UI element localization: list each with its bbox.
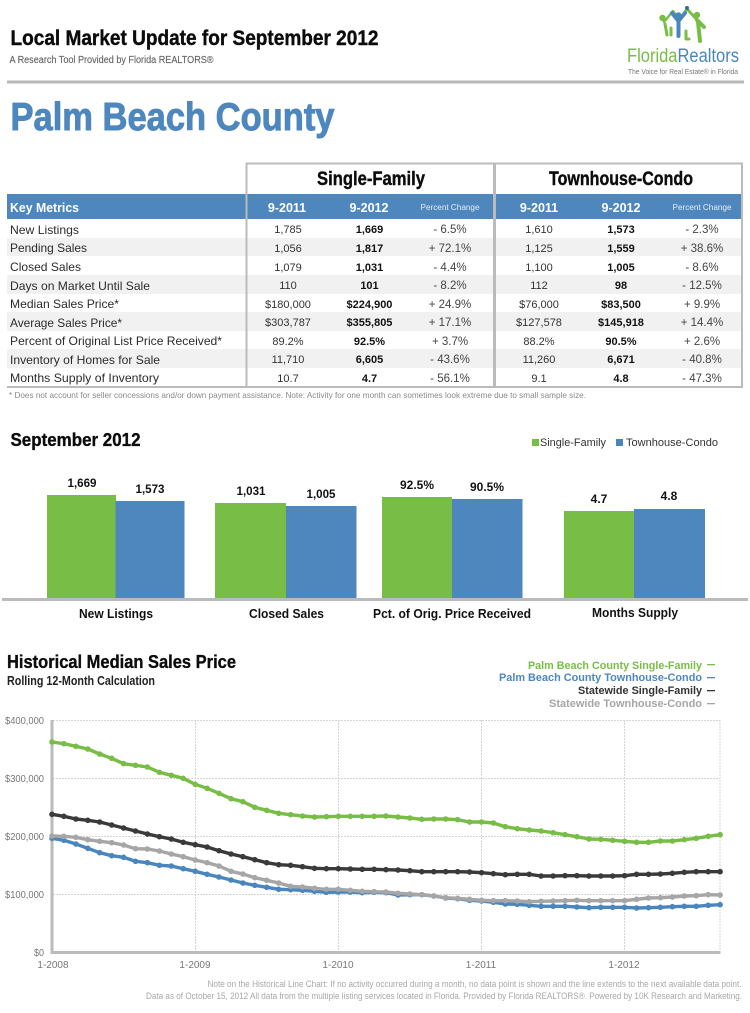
townhouse-condo values (516, 224, 723, 385)
townhouse-condo values: + 2.6% (684, 336, 720, 348)
table header bar: 9-2012 (350, 201, 389, 215)
single-family values: 11,710 (272, 354, 304, 366)
line: Palm Beach County Townhouse-Condo (52, 838, 720, 908)
single-family values: + 17.1% (429, 317, 471, 329)
line chart legend (499, 660, 715, 710)
bars: Months Supply: 4.8 (661, 489, 678, 503)
bars: Pct. of Orig. Price Received: 92.5% (400, 478, 434, 492)
townhouse-condo values: $76,000 (519, 299, 559, 311)
townhouse-condo values: 1,610 (525, 224, 553, 236)
single-family values: - 43.6% (430, 354, 470, 366)
line: Statewide Single-Family (52, 814, 720, 876)
county heading: Palm Beach County (10, 96, 335, 139)
townhouse-condo values: 1,125 (525, 243, 553, 255)
row labels: Pending Sales (10, 241, 87, 255)
y axis labels: $200,000 (5, 832, 44, 843)
row labels: New Listings (10, 223, 79, 237)
townhouse-condo values: - 12.5% (682, 280, 722, 292)
bars: New Listings (47, 476, 184, 621)
townhouse-condo values: $127,578 (516, 317, 562, 329)
y axis labels: $100,000 (5, 890, 44, 901)
bars: Closed Sales: 1,031 (236, 484, 266, 498)
single-family values: 101 (360, 280, 379, 292)
line chart legend: Palm Beach County Townhouse-Condo (499, 672, 702, 684)
bars: Pct. of Orig. Price Received (373, 478, 531, 621)
townhouse-condo values: 112 (530, 280, 548, 292)
townhouse-condo values: 9.1 (531, 373, 547, 385)
single-family values: 1,669 (356, 224, 383, 236)
townhouse-condo values: 1,005 (607, 262, 635, 274)
line chart heading: Historical Median Sales Price (7, 652, 236, 672)
single-family values: 1,056 (274, 243, 302, 255)
single-family values (265, 224, 471, 385)
townhouse-condo values: - 8.6% (685, 262, 719, 274)
line chart legend: Statewide Single-Family (578, 685, 703, 697)
bar chart legend: Single-Family (540, 437, 606, 449)
header (7, 6, 744, 139)
table header bar: Key Metrics (10, 201, 79, 215)
townhouse-condo values: 1,573 (607, 224, 635, 236)
townhouse-condo values: 1,100 (525, 262, 553, 274)
line chart subheading: Rolling 12-Month Calculation (7, 674, 155, 688)
townhouse-condo values: $145,918 (598, 317, 644, 329)
y axis labels: $400,000 (5, 716, 44, 727)
townhouse-condo values: 88.2% (523, 336, 555, 348)
bars: New Listings: New Listings (79, 606, 153, 621)
single-family values: $180,000 (265, 299, 311, 311)
single-family values: $224,900 (347, 299, 392, 311)
bar chart legend: Townhouse-Condo (626, 437, 718, 449)
chart footnotes (146, 979, 742, 1001)
logo: Florida Realtors (627, 6, 739, 76)
townhouse-condo values: + 38.6% (681, 243, 723, 255)
x axis labels: 1-2008 (37, 960, 69, 971)
row labels: Average Sales Price* (10, 316, 122, 330)
line: Palm Beach County Single-Family (52, 742, 720, 842)
table header bar: 9-2011 (268, 201, 306, 215)
single-family values: + 72.1% (429, 243, 471, 255)
line chart legend: Palm Beach County Single-Family (528, 660, 703, 672)
x axis labels: 1-2011 (466, 960, 497, 971)
panel: September 2012 bar chart (2, 430, 748, 621)
townhouse-condo values: 1,559 (607, 243, 635, 255)
single-family values: 10.7 (277, 373, 299, 385)
line chart legend: Statewide Townhouse-Condo (549, 698, 702, 710)
single-family values: - 56.1% (430, 373, 470, 385)
single-family values: $303,787 (265, 317, 311, 329)
y axis labels: $300,000 (5, 774, 44, 785)
panel: key metrics table (7, 162, 743, 388)
townhouse-condo values: 90.5% (605, 336, 637, 348)
row labels: Inventory of Homes for Sale (10, 353, 160, 367)
row labels: Days on Market Until Sale (10, 279, 150, 293)
bars: Closed Sales: Closed Sales (249, 606, 324, 621)
bars: Closed Sales: 1,005 (306, 487, 336, 501)
panel: historical median sales price (5, 652, 720, 971)
table header bar: 9-2011 (520, 201, 558, 215)
row labels: Closed Sales (10, 260, 81, 274)
x axis labels: 1-2012 (608, 960, 640, 971)
townhouse-condo values: 4.8 (613, 373, 629, 385)
row labels: Median Sales Price* (10, 297, 119, 311)
townhouse-condo values: - 47.3% (682, 373, 722, 385)
townhouse-condo values: 6,671 (607, 354, 635, 366)
group heading: Single-Family: Single-Family (317, 169, 425, 190)
townhouse-condo values: - 2.3% (685, 224, 719, 236)
single-family values: + 3.7% (432, 336, 468, 348)
table header bar: Percent Change (420, 202, 480, 212)
y axis labels: $0 (34, 948, 44, 959)
single-family values: $355,805 (347, 317, 392, 329)
group heading: Townhouse-Condo: Townhouse-Condo (549, 169, 693, 190)
single-family values: - 4.4% (433, 262, 467, 274)
single-family values: 1,079 (274, 262, 302, 274)
single-family values: 6,605 (356, 354, 383, 366)
bars: New Listings: 1,669 (68, 476, 97, 490)
row labels: Months Supply of Inventory (10, 371, 159, 385)
bars: Months Supply: Months Supply (592, 605, 679, 620)
row labels: Percent of Original List Price Received* (10, 334, 222, 348)
bars: Pct. of Orig. Price Received: 90.5% (470, 480, 504, 494)
table footnote: * Does not account for seller concessions and/or down payment assistance. Note: Activity for one month can sometimes look extreme due to small sample size. (9, 390, 586, 400)
single-family values: 89.2% (272, 336, 304, 348)
table header bar (7, 194, 742, 219)
title: Local Market Update for September 2012 (10, 27, 378, 50)
single-family values: + 24.9% (429, 299, 471, 311)
logo tagline: The Voice for Real Estate® in Florida (628, 67, 739, 76)
icon: houses and people (659, 6, 704, 41)
single-family values: - 6.5% (433, 224, 467, 236)
bars: Months Supply (564, 489, 705, 620)
townhouse-condo values: $83,500 (601, 299, 641, 311)
townhouse-condo values: - 40.8% (682, 354, 722, 366)
single-family values: 4.7 (362, 373, 377, 385)
single-family values: 110 (279, 280, 297, 292)
townhouse-condo values: + 9.9% (684, 299, 720, 311)
townhouse-condo values: 98 (615, 280, 627, 292)
bars: Pct. of Orig. Price Received: Pct. of Orig. Price Received (373, 606, 531, 621)
logo wordmark: FloridaRealtors (627, 46, 739, 67)
x axis labels (37, 960, 640, 971)
single-family values: - 8.2% (433, 280, 467, 292)
bars: Months Supply: 4.7 (591, 492, 608, 506)
bar chart heading: September 2012 (10, 430, 140, 450)
single-family values: 1,817 (356, 243, 383, 255)
line: Statewide Townhouse-Condo (52, 836, 720, 902)
single-family values: 1,785 (274, 224, 302, 236)
x axis labels: 1-2010 (322, 960, 354, 971)
townhouse-condo values: + 14.4% (681, 317, 723, 329)
single-family values: 92.5% (354, 336, 385, 348)
bars: Closed Sales (215, 484, 356, 621)
bars: New Listings: 1,573 (136, 482, 165, 496)
row labels (10, 223, 222, 385)
table header bar: Percent Change (672, 202, 732, 212)
bar chart legend (532, 437, 718, 449)
single-family values: 1,031 (356, 262, 383, 274)
townhouse-condo values: 11,260 (523, 354, 555, 366)
table header bar: 9-2012 (602, 201, 641, 215)
subtitle: A Research Tool Provided by Florida REALTORS® (10, 55, 214, 66)
x axis labels: 1-2009 (179, 960, 211, 971)
y axis labels (5, 716, 44, 959)
